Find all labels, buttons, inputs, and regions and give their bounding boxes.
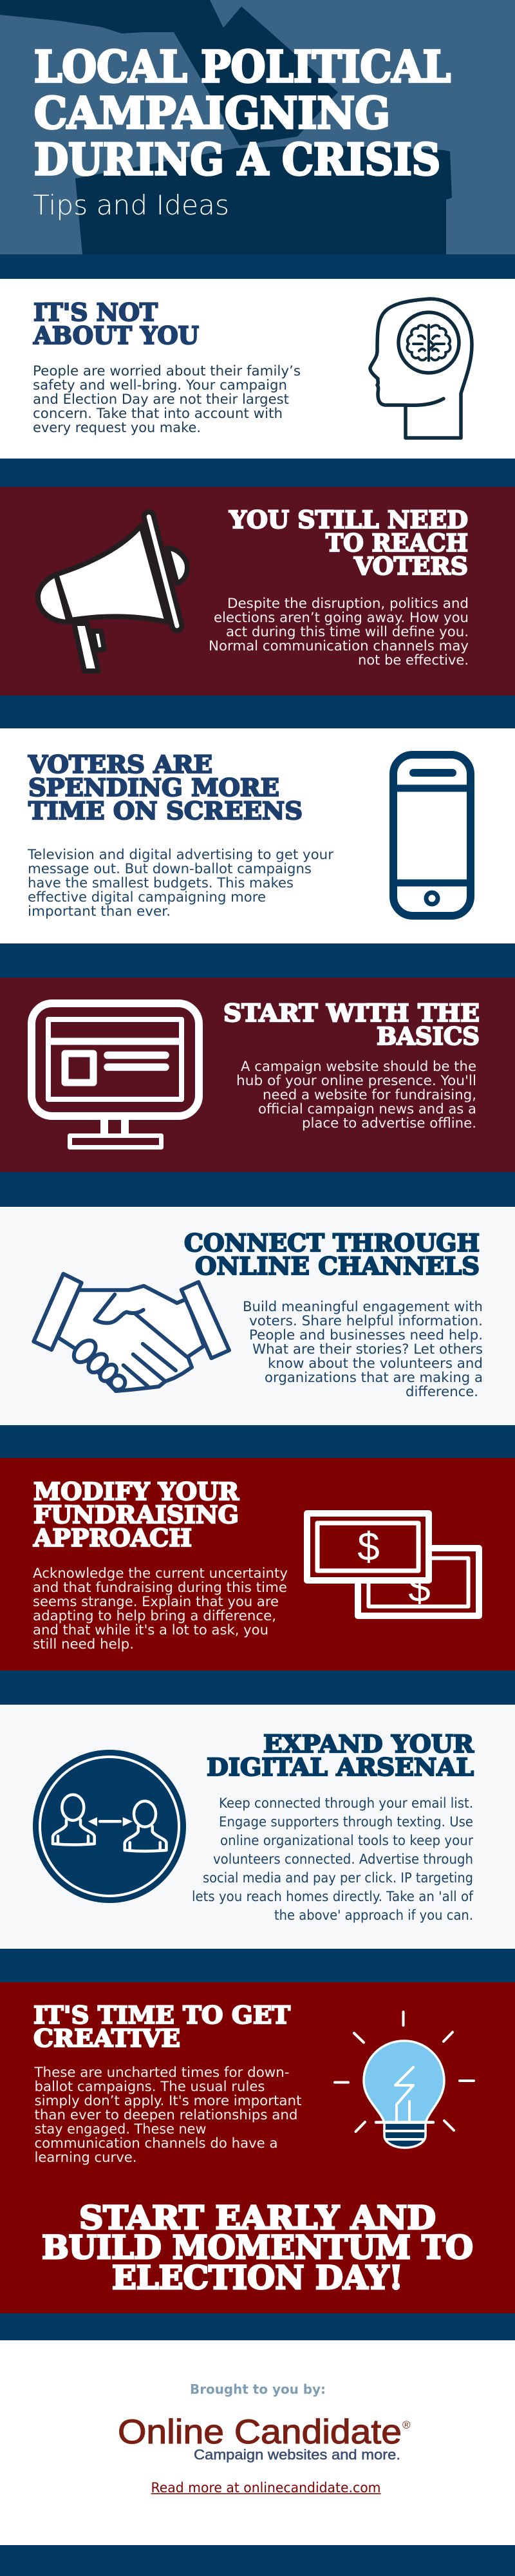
text block	[34, 2065, 301, 2166]
icon: banknotes	[307, 1513, 479, 1616]
logo: Online Candidate	[118, 2413, 402, 2451]
text block: Keep connected through your email list.	[219, 1795, 473, 1812]
text block: the above' approach if you can.	[274, 1908, 473, 1924]
heading: TO REACH	[326, 529, 468, 557]
panel: connect through online channels	[0, 1207, 515, 1425]
text block: social media and pay per click. IP targeting	[203, 1870, 473, 1886]
text block: and Election Day are not their largest	[33, 392, 289, 408]
text block: What are their stories? Let others	[252, 1341, 483, 1358]
call to action	[42, 2199, 473, 2297]
icon: light bulb	[335, 2012, 474, 2148]
heading: SPENDING MORE	[28, 773, 279, 802]
call to action: ELECTION DAY!	[112, 2259, 403, 2297]
text block: difference.	[406, 1384, 478, 1400]
panel: voters on screens	[0, 728, 515, 943]
icon: head with brain	[370, 299, 472, 438]
hero photo: hand casting ballot into box	[0, 0, 452, 254]
text block: lets you reach homes directly. Take an 'all of	[192, 1889, 473, 1905]
panel: time to get creative	[0, 1982, 515, 2313]
logo	[118, 2413, 411, 2463]
text block: official campaign news and as a	[258, 1101, 476, 1117]
panel: start with the basics	[0, 978, 515, 1172]
text block: Engage supporters through texting. Use	[219, 1814, 473, 1830]
call to action: START EARLY AND	[79, 2199, 436, 2237]
text block: adapting to help bring a difference,	[33, 1608, 276, 1624]
heading: YOU STILL NEED	[229, 506, 468, 534]
panel: footer	[0, 2340, 515, 2545]
credit line: Brought to you by:	[190, 2382, 326, 2397]
icon: banknotes: $	[408, 1566, 431, 1611]
text block: learning curve.	[35, 2150, 136, 2166]
text block: elections aren’t going away. How you	[214, 610, 469, 626]
text block: have the smallest budgets. This makes	[28, 875, 294, 891]
heading	[33, 298, 199, 350]
text block: Normal communication channels may	[209, 638, 469, 654]
text block: These are uncharted times for down-	[34, 2065, 289, 2081]
text block: place to advertise offline.	[302, 1115, 476, 1132]
text block	[27, 847, 333, 920]
heading: IT'S TIME TO GET	[33, 2001, 290, 2029]
title: CAMPAIGNING	[34, 88, 390, 138]
icon: smartphone	[393, 755, 471, 916]
text block: act during this time will define you.	[226, 624, 469, 640]
title: DURING A CRISIS	[34, 134, 440, 185]
text block: know about the volunteers and	[268, 1356, 483, 1372]
text block: effective digital campaigning more	[28, 889, 266, 905]
text block: A campaign website should be the	[241, 1059, 476, 1075]
heading: START WITH THE	[223, 999, 480, 1027]
icon: two people exchanging	[33, 1750, 186, 1903]
text block: People are worried about their family’s	[33, 363, 301, 379]
text block: than ever to deepen relationships and	[35, 2107, 297, 2123]
heading: CREATIVE	[33, 2024, 180, 2052]
text block: and that while it's a lot to ask, you	[33, 1622, 268, 1638]
text block: Build meaningful engagement with	[243, 1299, 483, 1315]
heading: IT'S NOT	[33, 298, 158, 327]
heading: MODIFY YOUR	[33, 1477, 239, 1506]
text block: volunteers connected. Advertise through	[213, 1852, 473, 1868]
panel: expand your digital arsenal	[0, 1705, 515, 1949]
text block: concern. Take that into account with	[33, 406, 283, 422]
text block: organizations that are making a	[265, 1370, 483, 1386]
text block: seems strange. Explain that you are	[33, 1594, 279, 1610]
subtitle: Tips and Ideas	[33, 189, 229, 221]
icon: banknotes: $	[357, 1525, 380, 1569]
heading: VOTERS ARE	[28, 750, 212, 779]
panel: modify your fundraising approach	[0, 1458, 515, 1671]
heading	[223, 999, 480, 1050]
heading: APPROACH	[33, 1524, 192, 1552]
text block: Despite the disruption, politics and	[227, 596, 469, 612]
icon: handshake	[33, 1274, 229, 1391]
heading: DIGITAL ARSENAL	[207, 1753, 474, 1781]
heading: ONLINE CHANNELS	[195, 1252, 480, 1280]
text block: People and businesses need help.	[249, 1327, 483, 1343]
logo: Campaign websites and more.	[194, 2447, 400, 2463]
heading: BASICS	[377, 1022, 480, 1050]
text block: safety and well-bring. Your campaign	[33, 377, 287, 393]
heading	[33, 1477, 239, 1552]
logo: ®	[402, 2419, 411, 2431]
text block: message out. But down-ballot campaigns	[28, 861, 312, 877]
heading	[33, 2001, 290, 2052]
panel: it's not about you	[0, 279, 515, 459]
text block: voters. Share helpful information.	[249, 1313, 483, 1329]
text block	[209, 596, 469, 668]
heading	[184, 1229, 480, 1280]
title	[34, 41, 451, 185]
text block: need a website for fundraising,	[263, 1087, 476, 1103]
link: Read more at onlinecandidate.com	[151, 2480, 381, 2496]
heading: EXPAND YOUR	[263, 1730, 474, 1758]
text block	[236, 1059, 476, 1132]
text block: Television and digital advertising to get your	[27, 847, 333, 863]
text block: Acknowledge the current uncertainty	[33, 1566, 288, 1582]
text block: and that fundraising during this time	[33, 1580, 287, 1596]
text block: simply don’t apply. It's more important	[35, 2093, 301, 2109]
text block: every request you make.	[33, 420, 201, 436]
text block: still need help.	[33, 1636, 134, 1653]
text block	[33, 363, 301, 436]
text block: ballot campaigns. The usual rules	[35, 2079, 265, 2095]
panel: hero	[0, 0, 515, 254]
heading	[28, 750, 303, 825]
text block: not be effective.	[358, 652, 469, 668]
panel: you still need to reach voters	[0, 487, 515, 696]
text block	[192, 1795, 473, 1924]
text block: hub of your online presence. You'll	[236, 1073, 476, 1089]
heading: FUNDRAISING	[33, 1501, 239, 1529]
text block: communication channels do have a	[35, 2136, 278, 2152]
heading	[207, 1730, 474, 1781]
text block	[243, 1299, 483, 1400]
icon: monitor with web page	[32, 1003, 199, 1148]
text block	[33, 1566, 288, 1653]
heading: ABOUT YOU	[33, 321, 199, 350]
text block: stay engaged. These new	[35, 2121, 206, 2137]
title: LOCAL POLITICAL	[34, 41, 451, 92]
call to action: BUILD MOMENTUM TO	[42, 2228, 473, 2266]
heading: VOTERS	[353, 552, 468, 580]
heading	[229, 506, 468, 580]
heading: CONNECT THROUGH	[184, 1229, 480, 1257]
heading: TIME ON SCREENS	[28, 797, 303, 825]
text block: online organizational tools to keep your	[220, 1833, 473, 1849]
text block: important than ever.	[28, 904, 171, 920]
icon: megaphone	[38, 511, 187, 671]
